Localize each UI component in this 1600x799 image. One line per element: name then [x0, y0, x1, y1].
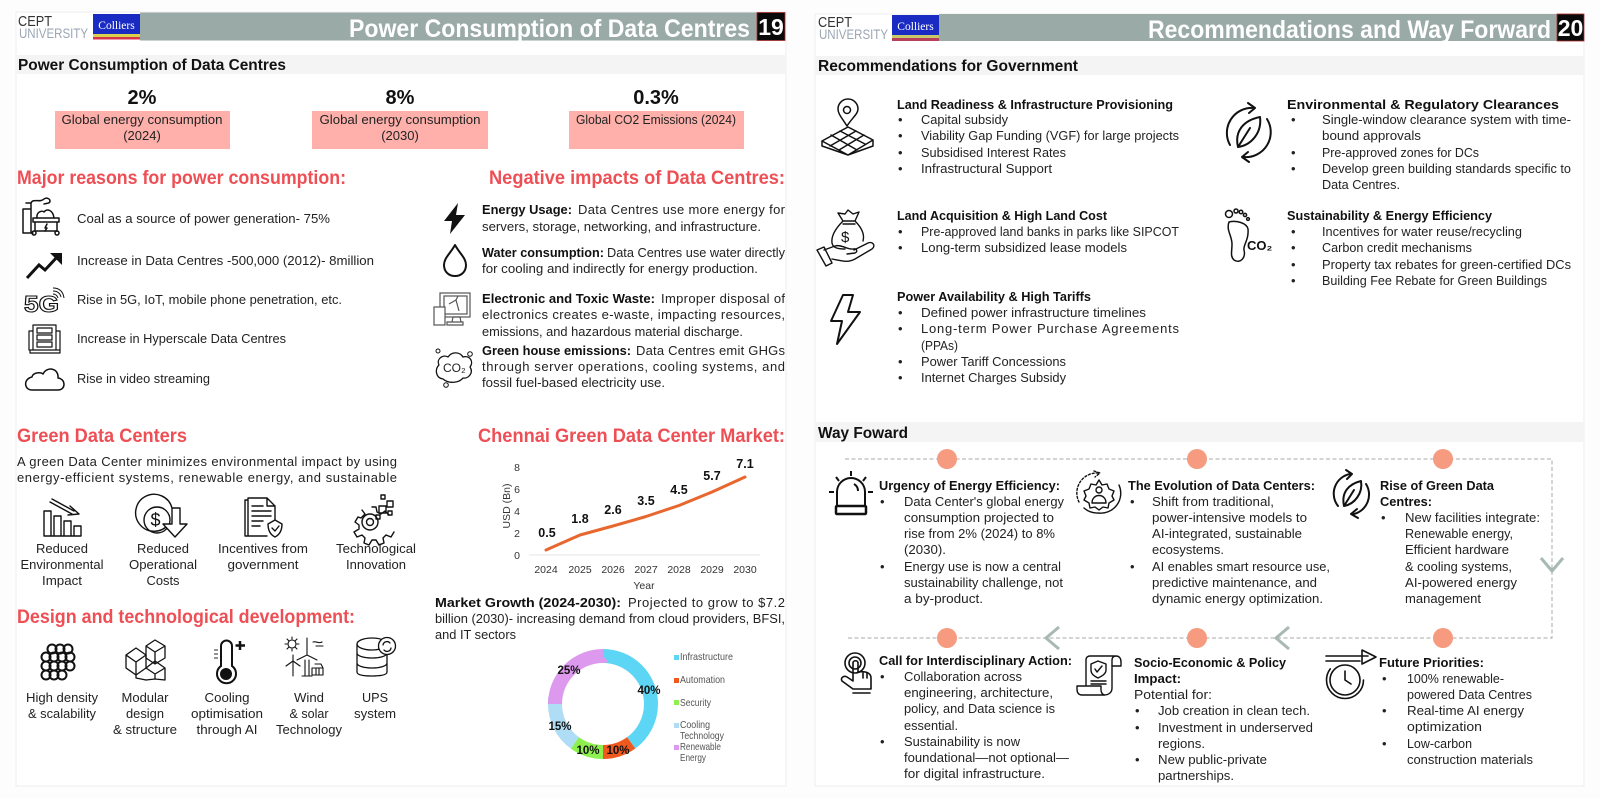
icon: modular cubes — [126, 640, 165, 680]
section heading: way forward: Way Foward — [818, 425, 908, 442]
logo: CEPT University: CEPT — [18, 13, 52, 30]
stat: 8%: (2030) — [381, 128, 419, 143]
text: market growth: Market Growth (2024-2030): — [435, 595, 621, 610]
step: evolution of data centers: ecosystems. — [1152, 542, 1224, 557]
step: socio-economic and policy impact: Impact: — [1134, 671, 1181, 686]
label: modular design: Modular — [122, 690, 169, 705]
icon: incentives document — [245, 498, 282, 537]
icon: policy scroll — [1077, 656, 1121, 695]
donut legend: Technology — [680, 730, 725, 742]
x axis labels: 2025 — [568, 564, 592, 576]
y axis labels — [501, 462, 520, 562]
recommendation: land readiness: • — [898, 112, 903, 127]
y axis labels: 0 — [514, 550, 520, 562]
section heading: Power Consumption of Data Centres — [18, 57, 286, 74]
donut legend — [674, 651, 733, 764]
step: rise of green data centres: Centres: — [1380, 494, 1432, 509]
stat: 2%: (2024) — [123, 128, 161, 143]
icon: pointing hand — [841, 653, 871, 693]
recommendation: land acquisition: Long-term subsidized lease models — [921, 240, 1127, 255]
label: incentives from government: Incentives from — [218, 541, 308, 556]
recommendation: power availability — [897, 289, 1180, 385]
logo: CEPT University: CEPT — [818, 14, 852, 31]
recommendation: land readiness: Infrastructural Support — [921, 161, 1052, 176]
icon: coal plant — [23, 198, 59, 235]
data labels: 4.5 — [670, 483, 688, 497]
text: energy usage: Energy Usage: — [482, 202, 572, 217]
logo: Colliers: Colliers — [897, 21, 934, 33]
recommendation: land acquisition: Land Acquisition & High Land Cost — [897, 208, 1108, 223]
icon: footprint CO2 — [1226, 209, 1272, 261]
donut legend: Infrastructure — [680, 651, 733, 663]
recommendation: land acquisition: • — [898, 224, 903, 239]
step: socio-economic and policy impact: • — [1135, 720, 1140, 735]
data labels: 3.5 — [637, 494, 655, 508]
step: urgency of energy efficiency — [879, 478, 1064, 606]
recommendation: environmental clearances: Data Centres. — [1322, 177, 1400, 192]
label: technological innovation — [336, 541, 416, 572]
donut legend: Energy — [680, 752, 707, 764]
step: evolution of data centers: power-intensive models to — [1152, 510, 1307, 525]
recommendation: power availability: • — [898, 354, 903, 369]
label: high density: & scalability — [28, 706, 96, 721]
step: future priorities: • — [1382, 703, 1387, 718]
line chart: market size — [501, 457, 760, 592]
step: future priorities: Real-time AI energy — [1407, 703, 1525, 718]
donut chart: 15% — [548, 721, 572, 733]
heading: negative impacts: Negative impacts of Data Centres: — [489, 168, 785, 189]
icon: clock with arrow — [1326, 650, 1376, 698]
icon: CO2 cloud: CO₂ — [443, 361, 466, 375]
icon: reduced impact — [44, 499, 81, 536]
label: modular design: & structure — [113, 722, 177, 737]
step: evolution of data centers: Shift from traditional, — [1152, 494, 1274, 509]
step: call for interdisciplinary action: essential. — [904, 718, 958, 733]
donut legend: Cooling — [680, 719, 710, 731]
data labels: 2.6 — [604, 503, 622, 517]
step: socio-economic and policy impact: • — [1135, 752, 1140, 767]
text: electronic waste: electronics creates e-waste, impacting resources, — [482, 307, 785, 322]
data labels: 1.8 — [571, 512, 589, 526]
label: technological innovation: Technological — [336, 541, 416, 556]
step: call for interdisciplinary action: policy, and Data science is — [904, 701, 1055, 716]
icon: alarm siren — [829, 471, 873, 514]
recommendation: land readiness: • — [898, 128, 903, 143]
donut chart: 10% — [606, 745, 630, 757]
recommendation: environmental clearances: • — [1291, 161, 1296, 176]
label: UPS system — [354, 690, 396, 721]
label: wind and solar: Wind — [294, 690, 324, 705]
timeline path — [845, 449, 1552, 648]
page title: Power Consumption of Data Centres — [349, 15, 750, 43]
list: major reasons: Increase in Hyperscale Data Centres — [77, 331, 286, 346]
icon: footprint CO2: CO₂ — [1247, 238, 1272, 253]
icon: electronic waste — [434, 293, 470, 325]
step: call for interdisciplinary action: foundational—not optional— — [904, 750, 1069, 765]
icon: high density — [42, 644, 74, 680]
logo: Colliers — [892, 15, 939, 41]
step: rise of green data centres — [1380, 478, 1540, 606]
icon: reduced costs — [136, 494, 187, 537]
stat: 0.3% — [569, 87, 744, 149]
step: urgency of energy efficiency: Urgency of Energy Efficiency: — [879, 478, 1060, 493]
recommendation: sustainability: • — [1291, 257, 1296, 272]
recommendation: power availability: • — [898, 321, 903, 336]
icon: green cycle leaf — [1334, 470, 1369, 518]
icon: technological innovation — [354, 495, 394, 545]
step: future priorities: Future Priorities: — [1379, 655, 1484, 670]
logo: CEPT University: UNIVERSITY — [819, 26, 889, 42]
logo: Colliers: Colliers — [98, 20, 135, 32]
label: UPS system: UPS — [362, 690, 388, 705]
section heading: recommendations: Recommendations for Government — [818, 58, 1078, 75]
heading: green data centers: Green Data Centers — [17, 426, 187, 447]
step: call for interdisciplinary action: • — [880, 669, 885, 684]
step: call for interdisciplinary action: engineering, architecture, — [904, 685, 1053, 700]
arrow: timeline left 1 — [1276, 627, 1289, 649]
stat: 0.3%: Global CO2 Emissions (2024) — [576, 112, 736, 127]
icon: money bag in hand — [817, 210, 874, 266]
recommendation: power availability: • — [898, 305, 903, 320]
step: urgency of energy efficiency: sustainability challenge, not — [904, 575, 1063, 590]
step: socio-economic and policy impact: • — [1135, 703, 1140, 718]
recommendation: environmental clearances: • — [1291, 145, 1296, 160]
step: call for interdisciplinary action — [879, 653, 1072, 781]
y axis labels: 8 — [514, 462, 520, 474]
logo: Colliers — [93, 14, 140, 40]
recommendation: land acquisition: • — [898, 240, 903, 255]
step: evolution of data centers — [1128, 478, 1330, 606]
text: green house emissions: fossil fuel-based electricity use. — [482, 375, 665, 390]
step: call for interdisciplinary action: Call for Interdisciplinary Action: — [879, 653, 1072, 668]
panel: recommendations and way forward — [815, 14, 1584, 786]
step: urgency of energy efficiency: (2030). — [904, 542, 946, 557]
step: future priorities — [1379, 655, 1533, 767]
green data center benefits — [20, 494, 416, 588]
step: future priorities: • — [1382, 736, 1387, 751]
recommendation: environmental clearances: Pre-approved zones for DCs — [1322, 145, 1479, 160]
donut legend: Security — [680, 697, 712, 709]
step: call for interdisciplinary action: Sustainability is now — [904, 734, 1021, 749]
recommendation: power availability: Power Availability & High Tariffs — [897, 289, 1091, 304]
label: high density — [26, 690, 98, 721]
heading: design and technological development: Design and technological development: — [17, 607, 355, 628]
page title: Recommendations and Way Forward — [1148, 16, 1551, 44]
recommendation: environmental clearances: • — [1291, 112, 1296, 127]
page number: 19 — [758, 14, 784, 40]
text: water consumption: Data Centres use water directly — [607, 245, 785, 260]
step: urgency of energy efficiency: • — [880, 559, 885, 574]
list: major reasons: Increase in Data Centres -500,000 (2012)- 8million — [77, 253, 374, 268]
recommendation: sustainability: Carbon credit mechanisms — [1322, 240, 1472, 255]
section heading: recommendations — [816, 56, 1584, 75]
stat: 2% — [55, 87, 230, 149]
donut legend: Renewable — [680, 741, 721, 753]
logo: CEPT University — [818, 14, 889, 42]
y axis labels: USD (Bn) — [501, 484, 513, 528]
stat: 8%: 8% — [386, 87, 415, 109]
text: water consumption: Water consumption: — [482, 245, 604, 260]
recommendation: sustainability: • — [1291, 273, 1296, 288]
recommendation: land readiness: Subsidised Interest Rates — [921, 145, 1066, 160]
recommendation: land readiness — [897, 97, 1179, 176]
step: rise of green data centres: Renewable energy, — [1405, 526, 1513, 541]
step: call for interdisciplinary action: • — [880, 734, 885, 749]
text: market growth: and IT sectors — [435, 627, 516, 642]
step: urgency of energy efficiency: Energy use is now a central — [904, 559, 1061, 574]
step: rise of green data centres: & cooling systems, — [1405, 559, 1512, 574]
x axis labels: 2027 — [634, 564, 658, 576]
icon: reduced costs: $ — [150, 510, 161, 530]
icon: hyperscale data centre — [29, 325, 60, 353]
label: cooling optimisation: through AI — [196, 722, 258, 737]
x axis labels — [534, 564, 757, 592]
x axis labels: 2028 — [667, 564, 691, 576]
step: call for interdisciplinary action: for digital infrastructure. — [904, 766, 1045, 781]
label: technological innovation: Innovation — [346, 557, 406, 572]
recommendation: land readiness: Viability Gap Funding (VGF) for large projects — [921, 128, 1179, 143]
recommendation: power availability: • — [898, 370, 903, 385]
step: future priorities: powered Data Centres — [1407, 687, 1532, 702]
recommendation: sustainability: • — [1291, 224, 1296, 239]
list: major reasons: Rise in 5G, IoT, mobile phone penetration, etc. — [77, 292, 342, 307]
recommendation: power availability: Defined power infrastructure timelines — [921, 305, 1147, 320]
donut chart: 10% — [576, 745, 600, 757]
step: evolution of data centers: • — [1130, 559, 1135, 574]
step: urgency of energy efficiency: • — [880, 494, 885, 509]
step: socio-economic and policy impact: New public-private — [1158, 752, 1267, 767]
label: reduced operational costs — [129, 541, 197, 588]
design features — [26, 637, 396, 737]
icon: money bag in hand: $ — [841, 229, 850, 246]
step: urgency of energy efficiency: Data Center's global energy — [904, 494, 1064, 509]
recommendation: sustainability: Building Fee Rebate for Green Buildings — [1322, 273, 1547, 288]
recommendation: land readiness: • — [898, 161, 903, 176]
heading: chennai market: Chennai Green Data Center Market: — [478, 426, 785, 447]
recommendation: power availability: Long-term Power Purchase Agreements — [921, 321, 1180, 336]
arrow: timeline down — [1541, 558, 1563, 571]
recommendation: environmental clearances: Single-window clearance system with time- — [1322, 112, 1571, 127]
step: evolution of data centers: predictive maintenance, and — [1152, 575, 1317, 590]
label: UPS system: system — [354, 706, 396, 721]
icon: wind and solar — [285, 637, 323, 676]
recommendation: sustainability — [1287, 208, 1571, 288]
logo: CEPT University: UNIVERSITY — [19, 25, 89, 41]
icon: rising trend — [27, 253, 62, 278]
icon: thermometer — [214, 641, 245, 683]
label: modular design — [113, 690, 177, 737]
step: evolution of data centers: • — [1130, 494, 1135, 509]
stat: 2%: Global energy consumption — [62, 112, 222, 127]
icon: 5G — [24, 288, 64, 317]
step: socio-economic and policy impact: Investment in underserved — [1158, 720, 1313, 735]
step: rise of green data centres: management — [1405, 591, 1481, 606]
recommendation: land readiness: Capital subsidy — [921, 112, 1008, 127]
text: green data center definition: energy-efficient systems, renewable energy, and sustainable — [17, 470, 397, 485]
list: major reasons: Rise in video streaming — [77, 371, 210, 386]
label: reduced environmental impact: Environmental — [20, 557, 104, 572]
step: socio-economic and policy impact: Socio-Economic & Policy — [1134, 655, 1287, 670]
label: cooling optimisation: optimisation — [191, 706, 263, 721]
y axis labels: 2 — [514, 528, 520, 540]
label: wind and solar — [276, 690, 342, 737]
text: electronic waste: Electronic and Toxic Waste: — [482, 291, 655, 306]
recommendation: environmental clearances: Develop green building standards specific to — [1322, 161, 1571, 176]
x axis labels: 2026 — [601, 564, 625, 576]
text: energy usage: servers, storage, networking, and infrastructure. — [482, 219, 761, 234]
icon: CO2 cloud — [436, 349, 472, 387]
label: wind and solar: & solar — [290, 706, 329, 721]
recommendation: sustainability: • — [1291, 240, 1296, 255]
recommendation: sustainability: Sustainability & Energy Efficiency — [1287, 208, 1493, 223]
data labels: 0.5 — [538, 526, 556, 540]
recommendation: power availability: (PPAs) — [921, 338, 958, 353]
step: future priorities: 100% renewable- — [1407, 671, 1504, 686]
donut chart: 25% — [557, 665, 581, 677]
step: urgency of energy efficiency: consumption projected to — [904, 510, 1054, 525]
heading: major reasons: Major reasons for power consumption: — [17, 168, 346, 189]
step: rise of green data centres: New facilities integrate: — [1405, 510, 1540, 525]
text: water consumption: for cooling and indirectly for energy production. — [482, 261, 758, 276]
text: green data center definition — [17, 454, 397, 485]
step: socio-economic and policy impact — [1134, 655, 1313, 783]
label: reduced operational costs: Operational — [129, 557, 197, 572]
label: modular design: design — [126, 706, 164, 721]
step: future priorities: Low-carbon — [1407, 736, 1472, 751]
step: urgency of energy efficiency: a by-product. — [904, 591, 983, 606]
text: green house emissions: Green house emissions: — [482, 343, 631, 358]
logo: CEPT University — [18, 13, 89, 41]
stat: 8%: Global energy consumption — [320, 112, 480, 127]
y axis labels: 6 — [514, 484, 520, 496]
label: cooling optimisation — [191, 690, 263, 737]
step: rise of green data centres: Rise of Green Data — [1380, 478, 1495, 493]
recommendation: power availability: Power Tariff Concessions — [921, 354, 1066, 369]
data labels: 5.7 — [703, 469, 721, 483]
label: reduced environmental impact: Impact — [42, 573, 82, 588]
icon: power bolt outline — [831, 295, 860, 344]
icon: water drop — [444, 245, 466, 276]
step: future priorities: construction materials — [1407, 752, 1533, 767]
header bar — [18, 12, 785, 43]
label: incentives from government — [218, 541, 308, 572]
header bar — [818, 14, 1584, 44]
panel: power consumption of data centres — [16, 12, 786, 786]
donut chart — [548, 656, 661, 757]
text: market growth: Projected to grow to $7.2 — [628, 595, 785, 610]
recommendation: land acquisition — [897, 208, 1179, 255]
arrow: timeline left 2 — [1046, 627, 1059, 649]
list: major reasons: Coal as a source of power generation- 75% — [77, 211, 330, 226]
recommendation: land acquisition: Pre-approved land banks in parks like SIPCOT — [921, 224, 1179, 239]
text: energy usage — [482, 202, 786, 234]
page number: 20 — [1558, 15, 1583, 41]
stat: 2%: 2% — [128, 87, 157, 109]
icon: bolt — [444, 203, 465, 234]
icon: UPS database — [357, 638, 396, 676]
step: socio-economic and policy impact: Job creation in clean tech. — [1158, 703, 1310, 718]
text: electronic waste: emissions, and hazardous material discharge. — [482, 324, 743, 339]
step: socio-economic and policy impact: Potential for: — [1134, 687, 1212, 702]
text: market growth: billion (2030)- increasing demand from cloud providers, BFSI, — [435, 611, 785, 626]
icon: cloud — [26, 369, 64, 390]
list: major reasons — [23, 198, 374, 390]
section heading — [17, 55, 785, 74]
stat: 0.3%: 0.3% — [633, 87, 679, 109]
icon: evolution gear — [1077, 471, 1121, 513]
text: green house emissions: Data Centres emit GHGs — [636, 343, 786, 358]
step: socio-economic and policy impact: partnerships. — [1158, 768, 1234, 783]
label: cooling optimisation: Cooling — [204, 690, 250, 705]
recommendation: sustainability: Property tax rebates for green-certified DCs — [1322, 257, 1571, 272]
text: energy usage: Data Centres use more energy for — [578, 202, 786, 217]
label: reduced environmental impact — [20, 541, 104, 588]
list: negative impacts — [434, 202, 786, 390]
data labels: 7.1 — [736, 457, 754, 471]
label: incentives from government: government — [228, 557, 299, 572]
label: high density: High density — [26, 690, 98, 705]
text: green house emissions — [482, 343, 786, 390]
step: socio-economic and policy impact: regions. — [1158, 736, 1205, 751]
text: market growth — [435, 595, 785, 642]
recommendation: environmental clearances: bound approvals — [1322, 128, 1422, 143]
recommendation: sustainability: Incentives for water reuse/recycling — [1322, 224, 1522, 239]
label: reduced environmental impact: Reduced — [36, 541, 88, 556]
text: green data center definition: A green Data Center minimizes environmental impact by using — [17, 454, 397, 469]
stat: 8% — [312, 87, 488, 149]
step: rise of green data centres: Efficient hardware — [1405, 542, 1509, 557]
recommendation: land readiness: Land Readiness & Infrastructure Provisioning — [897, 97, 1173, 112]
step: rise of green data centres: AI-powered energy — [1405, 575, 1518, 590]
x axis labels: 2029 — [700, 564, 724, 576]
text: green house emissions: through server operations, cooling systems, and — [482, 359, 785, 374]
label: reduced operational costs: Reduced — [137, 541, 189, 556]
step: urgency of energy efficiency: rise from 2% (2024) to 8% — [904, 526, 1055, 541]
icon: land pin — [822, 99, 873, 155]
text: electronic waste — [482, 291, 785, 339]
recommendation: land readiness: • — [898, 145, 903, 160]
icon: 5G: 5G — [24, 291, 59, 317]
step: rise of green data centres: • — [1381, 510, 1386, 525]
x axis labels: 2024 — [534, 564, 558, 576]
label: wind and solar: Technology — [276, 722, 342, 737]
section heading: way forward — [816, 422, 1584, 442]
step: evolution of data centers: dynamic energy optimization. — [1152, 591, 1323, 606]
step: evolution of data centers: AI-integrated, sustainable — [1152, 526, 1302, 541]
text: electronic waste: Improper disposal of — [661, 291, 785, 306]
recommendation: environmental clearances: Environmental & Regulatory Clearances — [1287, 97, 1559, 112]
x axis labels: Year — [633, 580, 655, 592]
data labels — [538, 457, 754, 540]
step: future priorities: • — [1382, 671, 1387, 686]
icon: environmental cycle leaf — [1227, 103, 1271, 162]
donut legend: Automation — [680, 674, 725, 686]
recommendation: power availability: Internet Charges Subsidy — [921, 370, 1066, 385]
step: evolution of data centers: AI enables smart resource use, — [1152, 559, 1330, 574]
step: call for interdisciplinary action: Collaboration across — [904, 669, 1022, 684]
text: water consumption — [482, 245, 785, 276]
label: reduced operational costs: Costs — [146, 573, 180, 588]
step: future priorities: optimization — [1407, 719, 1482, 734]
x axis labels: 2030 — [733, 564, 757, 576]
recommendation: environmental clearances — [1287, 97, 1571, 192]
data line — [546, 477, 745, 550]
donut chart: 40% — [637, 685, 661, 697]
y axis labels: 4 — [514, 506, 520, 518]
step: evolution of data centers: The Evolution of Data Centers: — [1128, 478, 1315, 493]
